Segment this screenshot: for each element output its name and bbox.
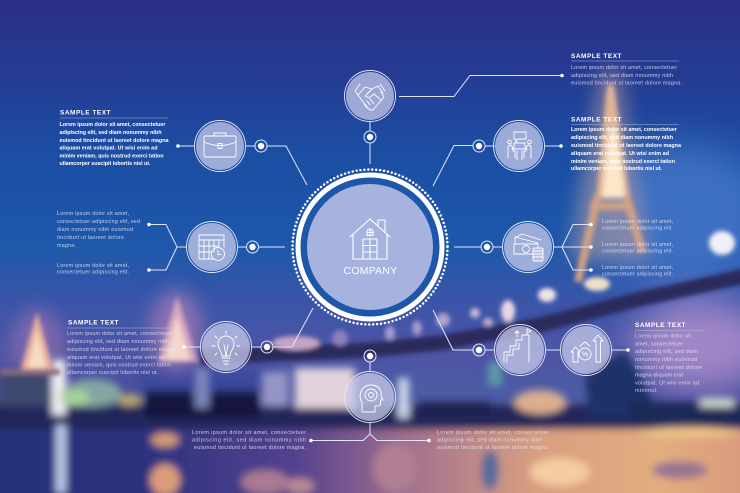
text block: bottom left: adipiscing elit, sed diam nonummy nibh bbox=[192, 438, 306, 444]
text block: percent bbox=[635, 322, 703, 394]
text block: lower left: ullamcorper suscipit lobortis nisl ut. bbox=[67, 370, 158, 376]
text block: bottom left bbox=[192, 430, 306, 451]
text block: left middle: tincidunt ut laoreet dolore bbox=[57, 235, 124, 241]
text block: percent: amet, consectetuer bbox=[635, 342, 683, 348]
text block: percent: volutpat. Ut wisi enim ad bbox=[635, 380, 699, 386]
text block: top left: SAMPLE TEXT bbox=[60, 110, 111, 116]
text block: top left: adipiscing elit, sed diam nonummy nibh bbox=[60, 130, 162, 136]
text block: lower left: aliquam erat volutpat. Ut wisi enim ad bbox=[67, 355, 165, 361]
text block: bottom right: euismod tincidunt ut laoreet dolore magna. bbox=[437, 445, 549, 451]
text block: lower left bbox=[67, 320, 176, 376]
text block: money: consectetuer adipiscing elit. bbox=[602, 272, 673, 278]
node: head bbox=[309, 350, 431, 442]
text block: money: Lorem ipsum dolor sit amet, bbox=[602, 219, 674, 225]
icon: bulb bbox=[212, 331, 240, 364]
icon: money bbox=[514, 234, 543, 261]
text block: left middle: Lorem ipsum dolor sit amet, bbox=[57, 263, 130, 269]
text block: percent: adipiscing elit, sed diam bbox=[635, 349, 698, 355]
text block: lower left: SAMPLE TEXT bbox=[68, 320, 119, 326]
text block: top right: euismod tincidunt ut laoreet dolore magna. bbox=[571, 80, 682, 86]
text block: top left: Lorem ipsum dolor sit amet, consectetuer bbox=[60, 122, 166, 128]
icon: head with gears bbox=[360, 385, 383, 412]
node: money bbox=[454, 222, 593, 272]
text block: percent: minimut. bbox=[635, 388, 658, 394]
text block: bottom left: Lorem ipsum dolor sit amet, consectetuer bbox=[192, 430, 306, 436]
text block: left middle bbox=[57, 211, 140, 276]
central company hub bbox=[292, 170, 448, 324]
text block: bottom right: Lorem ipsum dolor sit amet, consectetuer bbox=[437, 430, 549, 436]
text block: top left: ullamcorper suscipit lobortis nisl ut. bbox=[60, 161, 151, 167]
text block: percent: Lorem ipsum dolor sit bbox=[635, 334, 692, 340]
icon: house bbox=[350, 219, 390, 259]
icon: calendar bbox=[199, 235, 224, 260]
text block: left middle: consectetuer adipiscing elit. bbox=[57, 270, 129, 276]
text block: left middle: consectetuer adipiscing elit, sed bbox=[57, 219, 140, 225]
text block: top left: euismod tincidunt ut laoreet dolore magna bbox=[60, 138, 170, 144]
text block: top left: aliquam erat volutpat. Ut wisi enim ad bbox=[60, 146, 158, 152]
text block: meeting: SAMPLE TEXT bbox=[571, 116, 622, 124]
text block: meeting: euismod tincidunt ut laoreet dolore magna bbox=[571, 143, 682, 149]
icon: briefcase bbox=[204, 133, 236, 157]
text block: meeting: Lorem ipsum dolor sit amet, consectetuer bbox=[571, 127, 678, 133]
text block: bottom right bbox=[437, 430, 549, 451]
text block: percent: SAMPLE TEXT bbox=[635, 322, 686, 329]
text block: percent: nonummy nibh euismod bbox=[635, 357, 697, 363]
text block: money: Lorem ipsum dolor sit amet, bbox=[602, 242, 674, 248]
text block: top left bbox=[60, 110, 170, 167]
company label: COMPANY bbox=[344, 265, 398, 277]
text block: top right: adipiscing elit, sed diam nonummy nibh bbox=[571, 73, 673, 79]
text block: meeting: ullamcorper suscipit lobortis nisl ut. bbox=[571, 166, 662, 172]
tower and bridge bbox=[0, 85, 740, 372]
text block: meeting: aliquam erat volutpat. Ut wisi enim ad bbox=[571, 151, 669, 157]
node: light bulb bbox=[182, 308, 313, 372]
text block: money: consectetuer adipiscing elit. bbox=[602, 226, 673, 232]
text block: lower left: adipiscing elit, sed diam nonummy nibh bbox=[67, 339, 169, 345]
text block: percent: magna aliquam erat bbox=[635, 372, 684, 378]
node: briefcase bbox=[176, 120, 307, 185]
text block: meeting: adipiscing elit, sed diam nonummy nibh bbox=[571, 135, 673, 141]
node: meeting bbox=[433, 120, 563, 186]
icon: percent growth: % bbox=[582, 352, 588, 358]
icon: meeting bbox=[508, 132, 531, 160]
icon: percent growth bbox=[571, 335, 603, 362]
text block: meeting: minim veniam, quis nostrud exerci tation bbox=[571, 159, 675, 165]
text block: left middle: diam nonummy nibh euismod bbox=[57, 227, 133, 233]
text block: lower left: euismod tincidunt ut laoreet dolore magna bbox=[67, 347, 176, 353]
text block: meeting bbox=[571, 116, 682, 172]
text block: top right: SAMPLE TEXT bbox=[571, 53, 622, 60]
text block: top left: minim veniam, quis nostrud exerci tation bbox=[60, 154, 164, 160]
text block: bottom left: euismod tincidunt ut laoreet dolore magna. bbox=[194, 445, 306, 451]
text block: lower left: Lorem ipsum dolor sit amet, consectetuer bbox=[67, 331, 173, 337]
icon: handshake bbox=[355, 84, 385, 110]
text block: left middle: Lorem ipsum dolor sit amet, bbox=[57, 211, 130, 217]
text block: money: consectetuer adipiscing elit. bbox=[602, 248, 673, 254]
node: calendar bbox=[147, 222, 285, 272]
text block: percent: tincidunt ut laoreet dolore bbox=[635, 365, 702, 371]
text block: money: Lorem ipsum dolor sit amet, bbox=[602, 265, 674, 271]
node: stairs and percent bbox=[433, 310, 630, 376]
text block: top right bbox=[571, 53, 682, 86]
text block: lower left: minim veniam, quis nostrud exerci tation bbox=[67, 362, 171, 368]
text block: left middle: magna. bbox=[57, 243, 76, 249]
water bbox=[0, 350, 740, 493]
icon: stairs bbox=[504, 329, 531, 362]
text block: money bbox=[602, 219, 674, 278]
text block: bottom right: adipiscing elit, sed diam nonummy nibh bbox=[437, 438, 542, 444]
text block: top right: Lorem ipsum dolor sit amet, consectetuer bbox=[571, 65, 677, 71]
node: handshake bbox=[344, 70, 564, 164]
